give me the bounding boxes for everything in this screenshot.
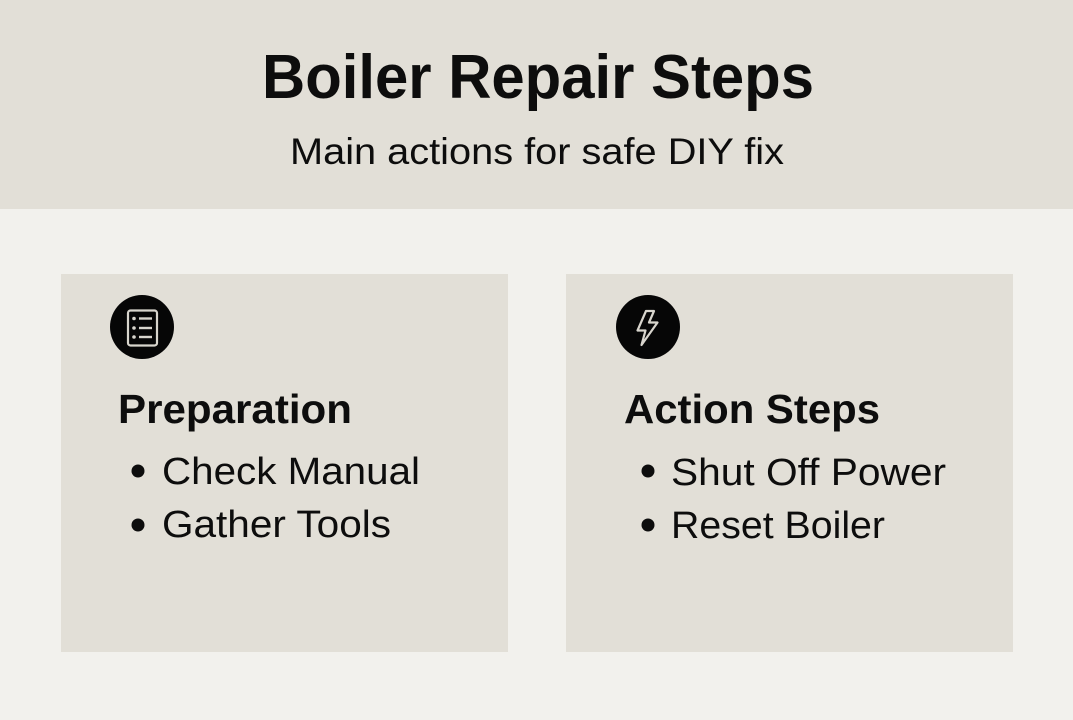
panel: preparation [61,274,508,652]
panel: action steps [566,274,1013,652]
bullet list: action steps: Reset Boiler [671,505,885,547]
bullet list: action steps: Shut Off Power [671,452,946,494]
panel heading: preparation: Preparation [118,386,352,432]
icon: checklist document [110,295,174,359]
bullet list: preparation: Check Manual [162,451,420,493]
bullet list: action steps [642,452,946,547]
subtitle: Main actions for safe DIY fix [290,131,785,172]
panel heading: action steps: Action Steps [624,386,880,432]
bullet list: preparation: Gather Tools [162,504,391,546]
icon: lightning bolt [616,295,680,359]
title: Boiler Repair Steps [262,43,814,112]
header band [0,0,1073,209]
bullet list: preparation [132,451,420,546]
